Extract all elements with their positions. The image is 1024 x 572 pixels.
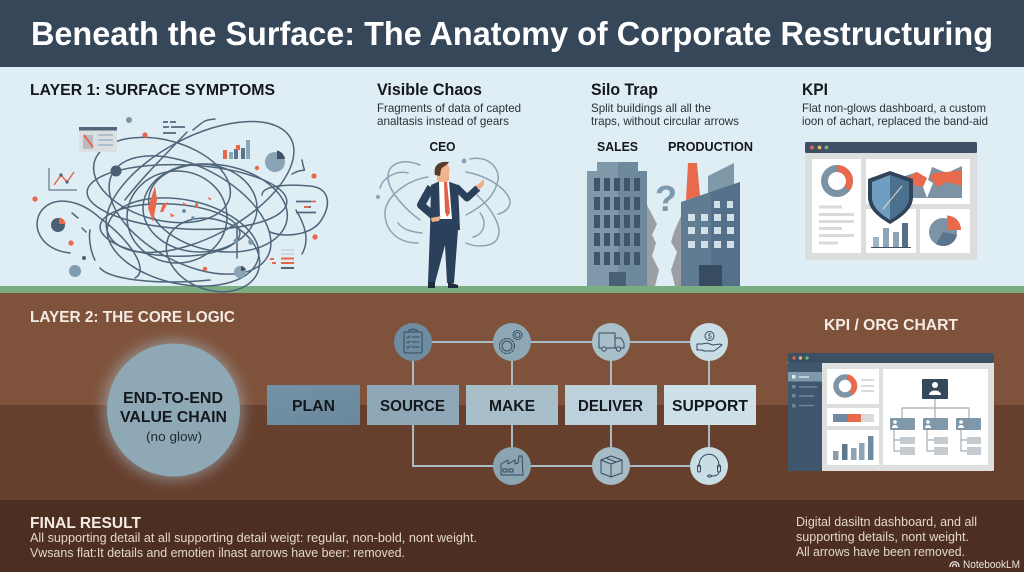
icon: question mark: ? <box>655 178 677 219</box>
watermark: NotebookLM: NotebookLM <box>963 559 1020 571</box>
loose dots <box>126 117 132 123</box>
label: PRODUCTION: PRODUCTION <box>668 140 753 154</box>
sidebar <box>788 363 822 471</box>
text block: closing note <box>796 515 977 559</box>
mini pie left <box>51 218 66 232</box>
background: upper soil layer <box>0 293 1024 405</box>
org chart <box>890 379 981 455</box>
chain box: SOURCE <box>367 385 459 425</box>
red core fragment <box>148 186 157 222</box>
illustration: sales building <box>587 162 659 286</box>
text block: KPI: ioon of achart, replaced the band-aid <box>802 114 988 128</box>
mini bar chart <box>223 140 250 159</box>
icon: box <box>592 447 630 485</box>
tangled lines <box>37 94 327 304</box>
icon: factory <box>493 447 531 485</box>
icon: headset <box>690 447 728 485</box>
shield icon <box>868 171 913 224</box>
icon: hand with coin: $ <box>708 334 712 340</box>
value chain hub circle: VALUE CHAIN <box>120 409 227 426</box>
text block: closing note: Digital dasiltn dashboard, and all <box>796 515 977 529</box>
panels <box>827 369 879 404</box>
chain box: SUPPORT <box>664 385 756 425</box>
text block: visible chaos: Visible Chaos <box>377 80 482 99</box>
background: bottom strip <box>0 500 1024 572</box>
chain box: PLAN <box>267 385 360 425</box>
text block: silo trap: Silo Trap <box>591 80 658 99</box>
label: CEO: CEO <box>430 140 456 154</box>
value chain hub circle: END-TO-END <box>123 390 223 407</box>
text block: visible chaos: Fragments of data of capted <box>377 101 521 115</box>
text block: silo trap: traps, without circular arrows <box>591 114 739 128</box>
heading: layer 1: LAYER 1: SURFACE SYMPTOMS <box>30 82 275 99</box>
chain box: MAKE <box>466 385 558 425</box>
icon: hand with coin <box>690 323 728 361</box>
background: ground line <box>0 286 1024 293</box>
text block: silo trap: Split buildings all all the <box>591 101 711 115</box>
mini pie top right <box>265 150 285 172</box>
illustration: production factory <box>671 163 740 286</box>
stacked bar <box>833 414 874 422</box>
text lines <box>819 207 854 243</box>
illustration: CEO figure <box>421 162 484 288</box>
value chain hub circle: (no glow) <box>146 429 202 444</box>
chain box: DELIVER <box>565 385 657 425</box>
illustration: tangled lines with data fragments <box>32 94 327 304</box>
chain box: SUPPORT: SUPPORT <box>672 398 749 415</box>
chain box: PLAN: PLAN <box>292 398 335 415</box>
text block: KPI: KPI <box>802 80 828 99</box>
background: sky layer <box>0 67 1024 286</box>
title bar <box>0 0 1024 67</box>
illustration: KPI dashboard <box>805 142 977 260</box>
icon: clipboard <box>394 323 432 361</box>
bar chart <box>833 436 874 460</box>
chain box: DELIVER: DELIVER <box>578 398 643 415</box>
chain box: SOURCE: SOURCE <box>380 398 445 415</box>
area chart with break <box>905 166 962 198</box>
text block: visible chaos <box>377 80 521 128</box>
connector lines <box>413 342 709 466</box>
mini pie bottom <box>234 266 246 278</box>
chain box: MAKE: MAKE <box>489 398 535 415</box>
heading: layer 2: LAYER 2: THE CORE LOGIC <box>30 309 235 326</box>
background: lower soil layer <box>0 405 1024 500</box>
mini lists <box>163 122 316 268</box>
text block: final result: FINAL RESULT <box>30 515 141 532</box>
icon: truck <box>592 323 630 361</box>
donut chart <box>836 377 855 395</box>
label: SALES: SALES <box>597 140 638 154</box>
icon: gears <box>493 323 531 361</box>
mini document <box>79 127 117 152</box>
text block: final result: All supporting detail at all supporting detail weigt: regular, non-bold, nont weight. <box>30 531 477 545</box>
heading: KPI / org chart: KPI / ORG CHART <box>824 317 959 334</box>
text block: KPI <box>802 80 988 128</box>
text block: KPI: Flat non-glows dashboard, a custom <box>802 101 986 115</box>
donut chart <box>824 168 850 194</box>
text block: final result <box>30 515 477 560</box>
text block: final result: Vwsans flat:It details and emotien ilnast arrows have beer: removed. <box>30 546 405 560</box>
value chain hub circle <box>103 340 243 480</box>
bar chart <box>871 223 911 248</box>
text block: closing note: supporting details, nont weight. <box>796 530 969 544</box>
pie chart <box>929 216 961 246</box>
illustration: swirling lines around CEO <box>376 158 510 246</box>
mini line chart <box>49 168 77 190</box>
text block: closing note: All arrows have been removed. <box>796 545 965 559</box>
text block: silo trap <box>591 80 739 128</box>
text block: visible chaos: analtasis instead of gears <box>377 114 509 128</box>
illustration: org chart dashboard <box>788 353 994 471</box>
title bar: Beneath the Surface: The Anatomy of Corporate Restructuring <box>31 16 993 53</box>
